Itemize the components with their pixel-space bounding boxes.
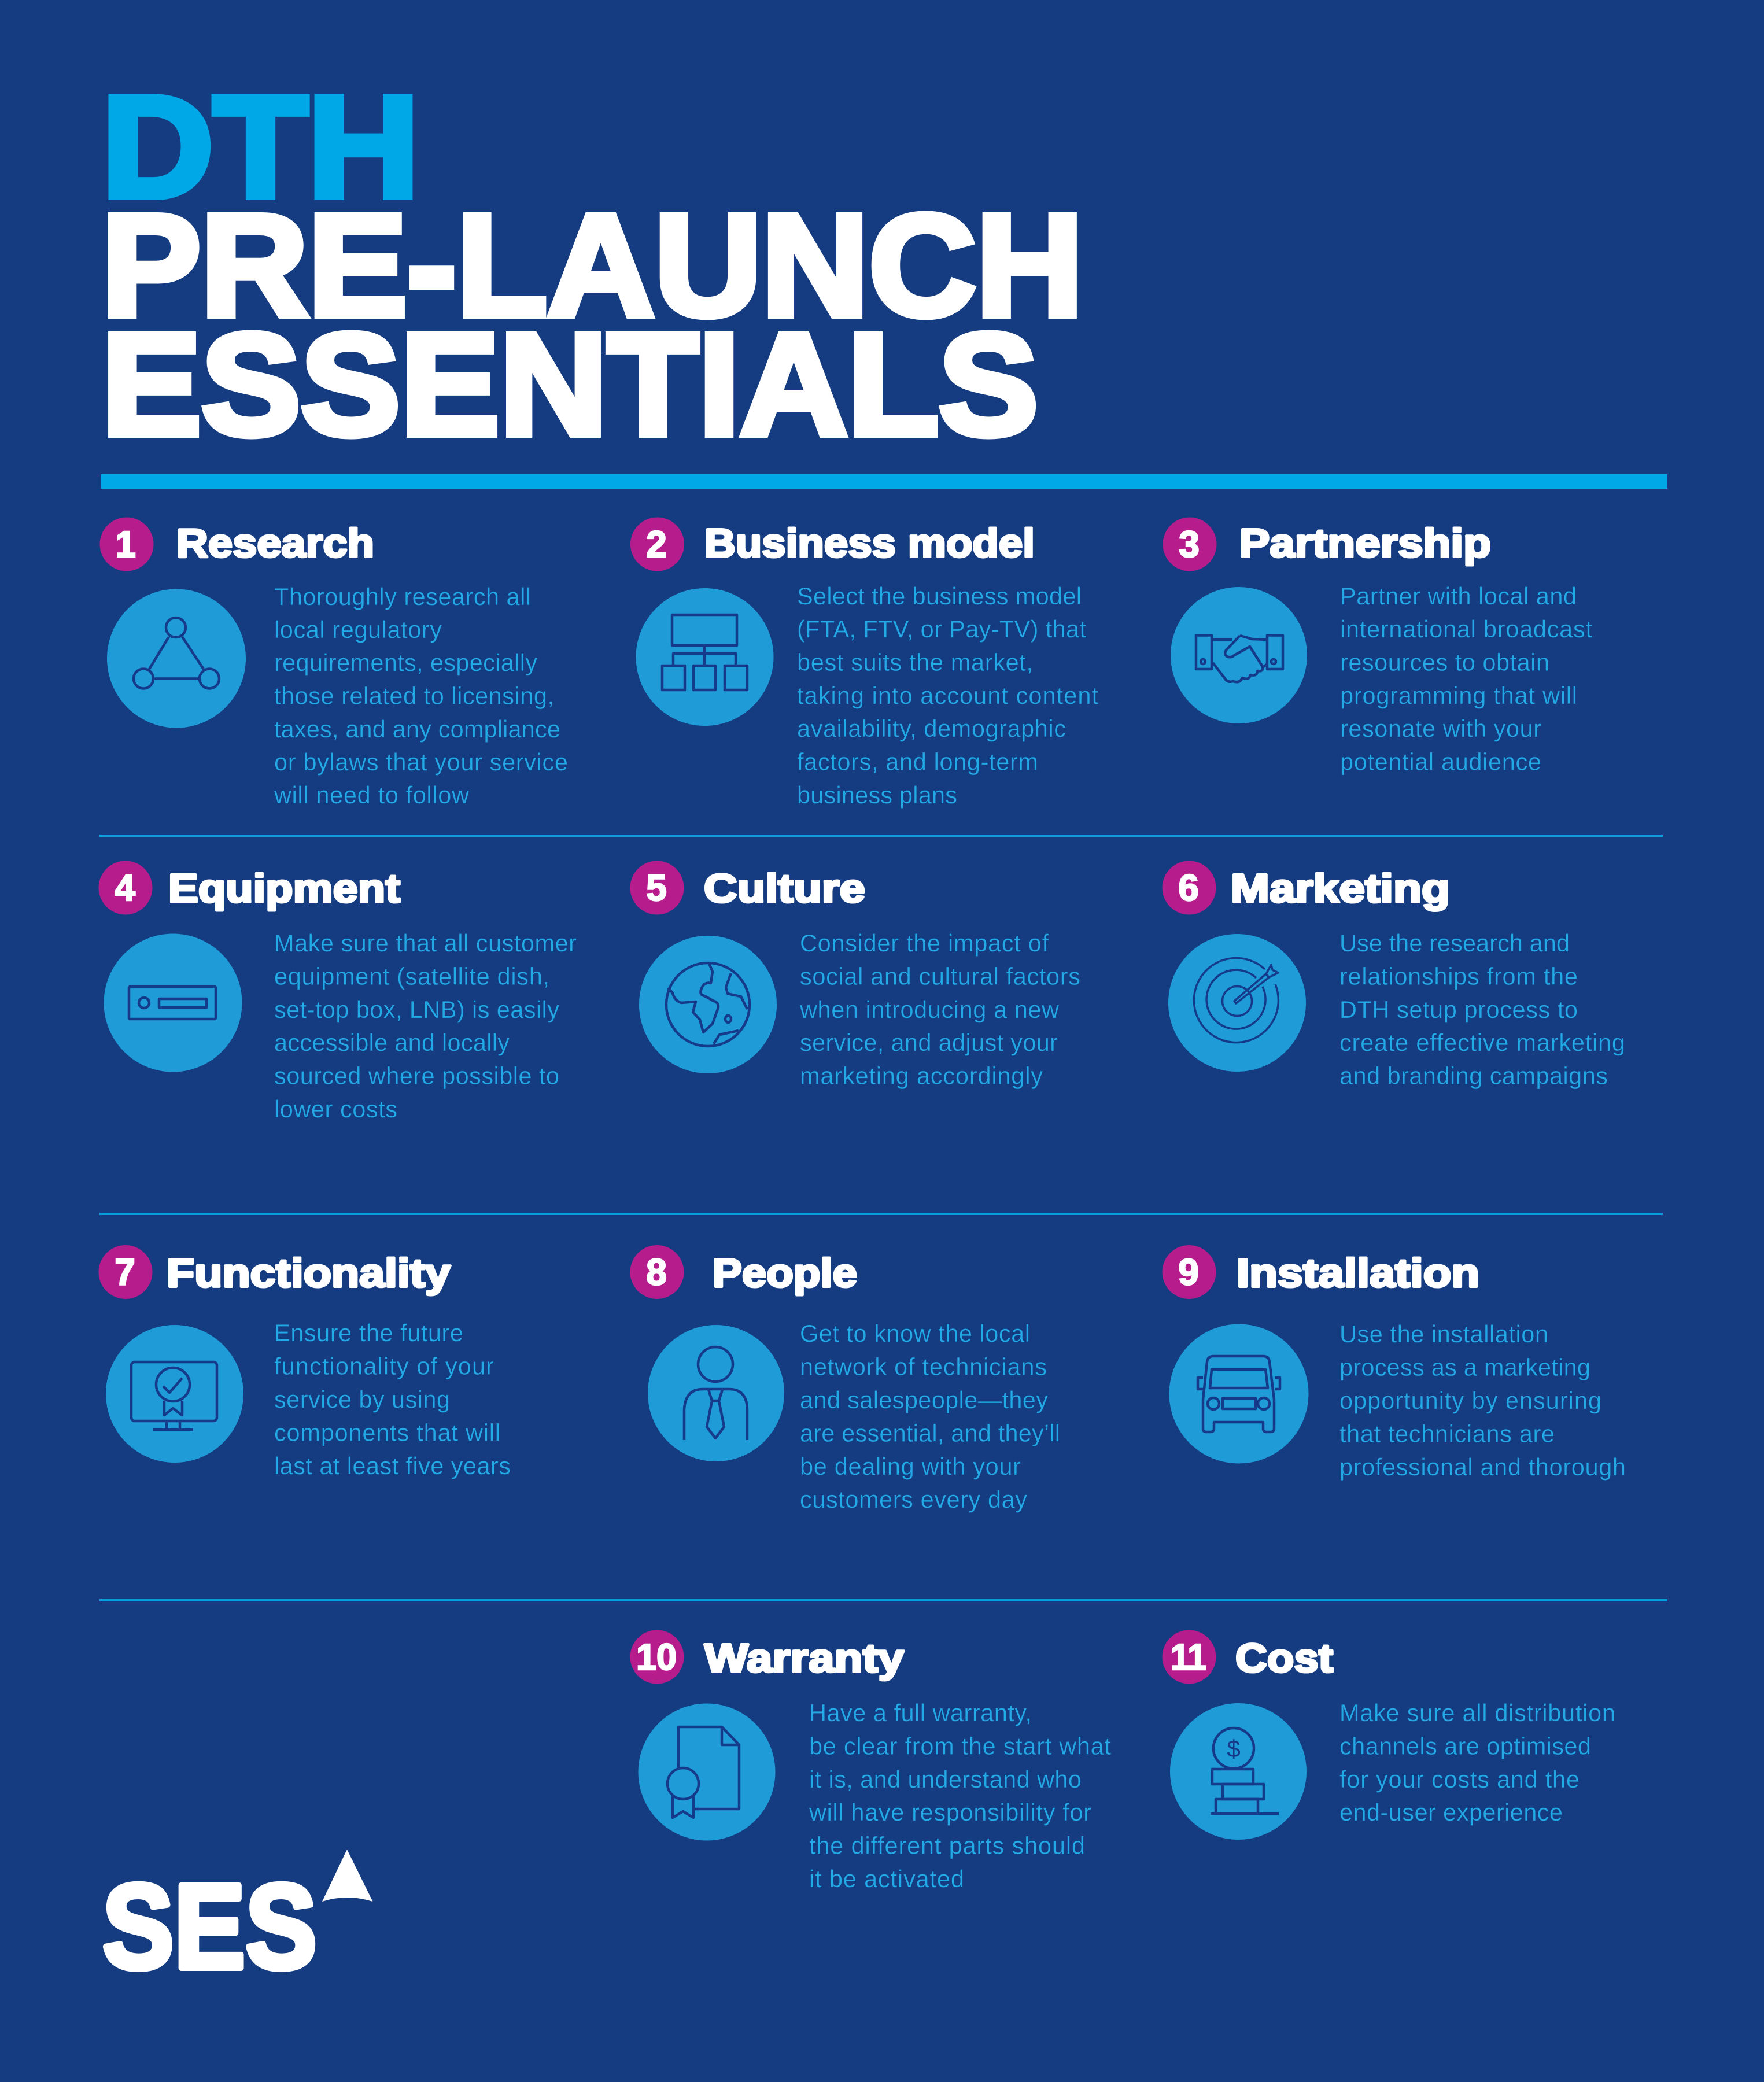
icon: target — [1168, 934, 1306, 1072]
panel: 9 Installation — [1163, 1245, 1626, 1481]
text: people: and salespeople—they — [800, 1386, 1048, 1413]
heading: People: People — [713, 1250, 857, 1295]
text: warranty: Have a full warranty, — [809, 1699, 1032, 1726]
text: partnership — [1340, 582, 1592, 775]
text: culture — [799, 929, 1080, 1090]
text: research — [274, 583, 568, 809]
badge 9: 9 — [1178, 1252, 1199, 1293]
icon: org chart — [636, 588, 774, 726]
heading: Partnership: Partnership — [1239, 520, 1491, 566]
text: business model — [797, 582, 1098, 809]
text: equipment: sourced where possible to — [274, 1062, 559, 1090]
text: business model: taking into account content — [797, 682, 1098, 709]
icon: network triangle — [107, 589, 246, 728]
text: partnership: resources to obtain — [1340, 649, 1549, 675]
text: cost: channels are optimised — [1339, 1733, 1591, 1759]
icon: van — [1169, 1324, 1308, 1463]
badge 11: 11 — [1171, 1636, 1206, 1678]
panel: 1 Research — [99, 517, 568, 809]
text: functionality: service by using — [274, 1386, 450, 1413]
SES logo: SES — [102, 1860, 317, 1994]
text: culture: social and cultural factors — [800, 962, 1080, 990]
panel: 3 Partnership — [1163, 517, 1592, 775]
badge 6 — [1163, 861, 1216, 915]
text: culture: service, and adjust your — [800, 1029, 1058, 1056]
text: partnership: international broadcast — [1340, 615, 1592, 643]
icon: set-top box — [104, 933, 242, 1072]
panel: 10 Warranty — [630, 1630, 1111, 1892]
text: installation: professional and thorough — [1339, 1453, 1626, 1481]
text: warranty — [809, 1699, 1111, 1892]
text: marketing: relationships from the — [1339, 962, 1578, 990]
badge 10: 10 — [636, 1636, 677, 1678]
text: people — [800, 1320, 1060, 1513]
text: people: customers every day — [800, 1486, 1027, 1513]
text: installation: Use the installation — [1339, 1320, 1548, 1348]
text: people: be dealing with your — [800, 1453, 1021, 1480]
badge 4: 4 — [115, 867, 135, 909]
panel: 5 Culture — [630, 861, 1080, 1090]
text: marketing: DTH setup process to — [1339, 996, 1578, 1023]
icon: person with tie — [648, 1325, 784, 1461]
text: cost: for your costs and the — [1339, 1766, 1580, 1793]
panel: 6 Marketing — [1163, 861, 1625, 1090]
text: partnership: Partner with local and — [1340, 582, 1577, 610]
badge 10 — [630, 1630, 684, 1684]
heading: Cost: Cost — [1235, 1636, 1333, 1681]
badge 4 — [98, 861, 153, 915]
icon: coin on stacked blocks — [1170, 1703, 1307, 1840]
heading: Marketing: Marketing — [1231, 866, 1450, 911]
badge 11 — [1163, 1630, 1216, 1684]
text: business model: best suits the market, — [797, 649, 1033, 675]
text: research: taxes, and any compliance — [274, 715, 560, 743]
heading: Culture: Culture — [704, 866, 865, 911]
badge 2 — [630, 517, 684, 571]
icon: handshake — [1171, 587, 1307, 723]
badge 7 — [98, 1245, 153, 1299]
text: research: Thoroughly research all — [274, 583, 531, 610]
badge 5 — [630, 861, 684, 915]
text: warranty: will have responsibility for — [809, 1799, 1091, 1826]
icon: coin on stacked blocks: $ — [1227, 1735, 1241, 1762]
text: research: local regulatory — [274, 616, 442, 643]
badge 7: 7 — [115, 1252, 135, 1293]
text: business model: Select the business model — [797, 582, 1082, 610]
text: partnership: resonate with your — [1340, 715, 1541, 742]
text: functionality — [274, 1319, 511, 1479]
title rule — [101, 474, 1667, 489]
text: warranty: it be activated — [809, 1865, 964, 1892]
badge 1 — [99, 517, 154, 571]
title: PRE-LAUNCH — [102, 184, 1083, 346]
text: partnership: potential audience — [1340, 748, 1541, 775]
text: marketing: Use the research and — [1339, 929, 1570, 957]
panel: 8 People — [630, 1245, 1060, 1513]
heading: Functionality: Functionality — [167, 1250, 451, 1295]
icon: globe — [639, 936, 777, 1073]
text: warranty: be clear from the start what — [809, 1733, 1111, 1759]
text: culture: when introducing a new — [799, 996, 1060, 1023]
text: equipment: accessible and locally — [274, 1029, 510, 1056]
text: equipment: equipment (satellite dish, — [274, 962, 549, 990]
title — [102, 66, 1083, 465]
text: warranty: it is, and understand who — [809, 1766, 1082, 1793]
heading: Warranty: Warranty — [704, 1636, 904, 1681]
text: cost: Make sure all distribution — [1339, 1699, 1615, 1726]
panel: 11 Cost — [1163, 1630, 1615, 1840]
text: research: will need to follow — [274, 781, 470, 809]
text: installation: opportunity by ensuring — [1339, 1387, 1601, 1414]
text: people: Get to know the local — [800, 1320, 1030, 1347]
text: marketing: and branding campaigns — [1339, 1062, 1608, 1090]
icon: warranty document — [639, 1704, 775, 1840]
text: marketing — [1339, 929, 1625, 1090]
badge 1: 1 — [115, 523, 136, 565]
heading: Research: Research — [176, 520, 374, 566]
text: business model: factors, and long-term — [797, 748, 1038, 775]
text: functionality: functionality of your — [274, 1352, 494, 1380]
text: equipment: set-top box, LNB) is easily — [274, 996, 559, 1023]
text: cost — [1339, 1699, 1615, 1826]
text: installation: process as a marketing — [1339, 1353, 1590, 1381]
text: culture: Consider the impact of — [800, 929, 1049, 957]
text: functionality: last at least five years — [274, 1452, 511, 1479]
badge 3: 3 — [1179, 523, 1200, 565]
text: business model: business plans — [797, 781, 957, 809]
panel: 2 Business model — [630, 517, 1098, 809]
text: installation — [1339, 1320, 1626, 1481]
text: functionality: components that will — [274, 1419, 500, 1446]
badge 9 — [1163, 1245, 1216, 1299]
icon: monitor with seal — [106, 1325, 243, 1463]
text: cost: end-user experience — [1339, 1799, 1563, 1826]
text: equipment — [274, 929, 577, 1123]
text: people: network of technicians — [800, 1353, 1047, 1380]
panel: 7 Functionality — [98, 1245, 511, 1479]
badge 8 — [630, 1245, 684, 1299]
panel: 4 Equipment — [98, 861, 577, 1123]
text: research: requirements, especially — [274, 649, 537, 676]
text: equipment: Make sure that all customer — [274, 929, 577, 957]
badge 2: 2 — [646, 523, 667, 565]
text: warranty: the different parts should — [809, 1832, 1085, 1859]
text: people: are essential, and they’ll — [800, 1419, 1060, 1447]
text: functionality: Ensure the future — [274, 1319, 463, 1346]
badge 3 — [1163, 517, 1217, 571]
text: culture: marketing accordingly — [800, 1062, 1043, 1090]
text: partnership: programming that will — [1340, 682, 1577, 709]
title: DTH — [102, 66, 419, 227]
text: research: or bylaws that your service — [274, 748, 568, 776]
text: research: those related to licensing, — [274, 682, 554, 709]
heading: Equipment: Equipment — [168, 866, 400, 911]
badge 6: 6 — [1178, 867, 1199, 909]
heading: Installation: Installation — [1237, 1250, 1479, 1295]
badge 8: 8 — [646, 1252, 667, 1293]
badge 5: 5 — [646, 867, 667, 909]
text: business model: (FTA, FTV, or Pay-TV) that — [797, 615, 1086, 643]
text: marketing: create effective marketing — [1339, 1029, 1625, 1056]
text: installation: that technicians are — [1339, 1420, 1555, 1447]
text: equipment: lower costs — [274, 1095, 397, 1123]
text: business model: availability, demographic — [797, 715, 1066, 742]
heading: Business model: Business model — [704, 520, 1035, 566]
title: ESSENTIALS — [102, 304, 1038, 465]
